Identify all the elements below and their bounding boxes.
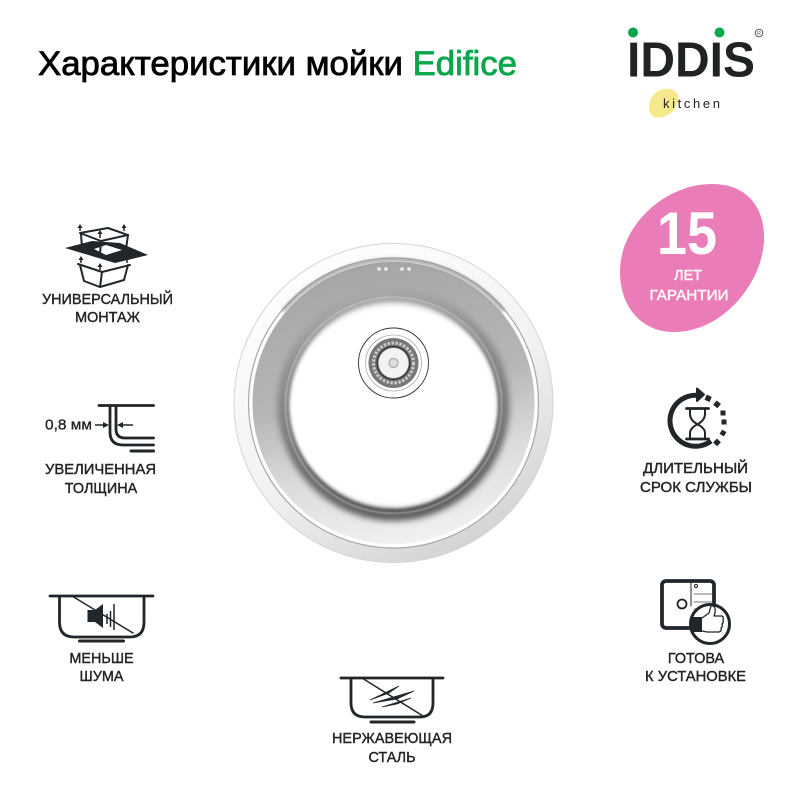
feature: increased thickness: ТОЛЩИНА bbox=[65, 481, 138, 497]
logo: IDDIS kitchen: kitchen bbox=[663, 96, 720, 111]
feature: ready to install bbox=[645, 581, 746, 685]
drain bbox=[358, 328, 428, 398]
warranty badge: ЛЕТ bbox=[674, 268, 702, 284]
warranty badge: 15 bbox=[657, 200, 717, 267]
feature: less noise bbox=[50, 596, 153, 685]
feature: increased thickness bbox=[45, 406, 156, 497]
feature: stainless steel: НЕРЖАВЕЮЩАЯ bbox=[332, 731, 452, 747]
feature: universal mounting bbox=[42, 224, 173, 326]
feature: ready to install: ГОТОВА bbox=[668, 651, 725, 667]
icon: cabinet with thumb up bbox=[662, 581, 730, 644]
feature: stainless steel: СТАЛЬ bbox=[368, 750, 416, 766]
logo: IDDIS kitchen: IDDIS bbox=[627, 34, 755, 88]
feature: increased thickness: УВЕЛИЧЕННАЯ bbox=[45, 462, 156, 478]
icon: wall thickness section: 0,8 мм bbox=[45, 416, 92, 434]
feature: long service life: ДЛИТЕЛЬНЫЙ bbox=[643, 459, 748, 477]
feature: universal mounting: УНИВЕРСАЛЬНЫЙ bbox=[42, 290, 173, 308]
icon: sink mounted above and below bbox=[65, 224, 148, 287]
feature: long service life: СРОК СЛУЖБЫ bbox=[640, 480, 752, 496]
title: Характеристики мойки Edifice bbox=[38, 45, 517, 83]
sink photo bbox=[234, 244, 553, 562]
icon: sink with scratches bbox=[341, 678, 443, 722]
warranty badge bbox=[620, 184, 764, 332]
feature: universal mounting: МОНТАЖ bbox=[75, 310, 141, 326]
feature: less noise: МЕНЬШЕ bbox=[69, 651, 134, 667]
feature: stainless steel bbox=[332, 678, 452, 766]
logo: IDDIS kitchen: R bbox=[757, 31, 761, 37]
warranty badge: ГАРАНТИИ bbox=[650, 288, 728, 304]
icon: sink with speaker bbox=[50, 596, 153, 641]
icon: hourglass with circular arrow bbox=[670, 388, 726, 446]
feature: long service life bbox=[640, 388, 752, 496]
overflow holes bbox=[377, 267, 411, 271]
feature: ready to install: К УСТАНОВКЕ bbox=[645, 669, 746, 685]
logo: IDDIS kitchen bbox=[627, 28, 763, 118]
feature: less noise: ШУМА bbox=[80, 669, 124, 685]
